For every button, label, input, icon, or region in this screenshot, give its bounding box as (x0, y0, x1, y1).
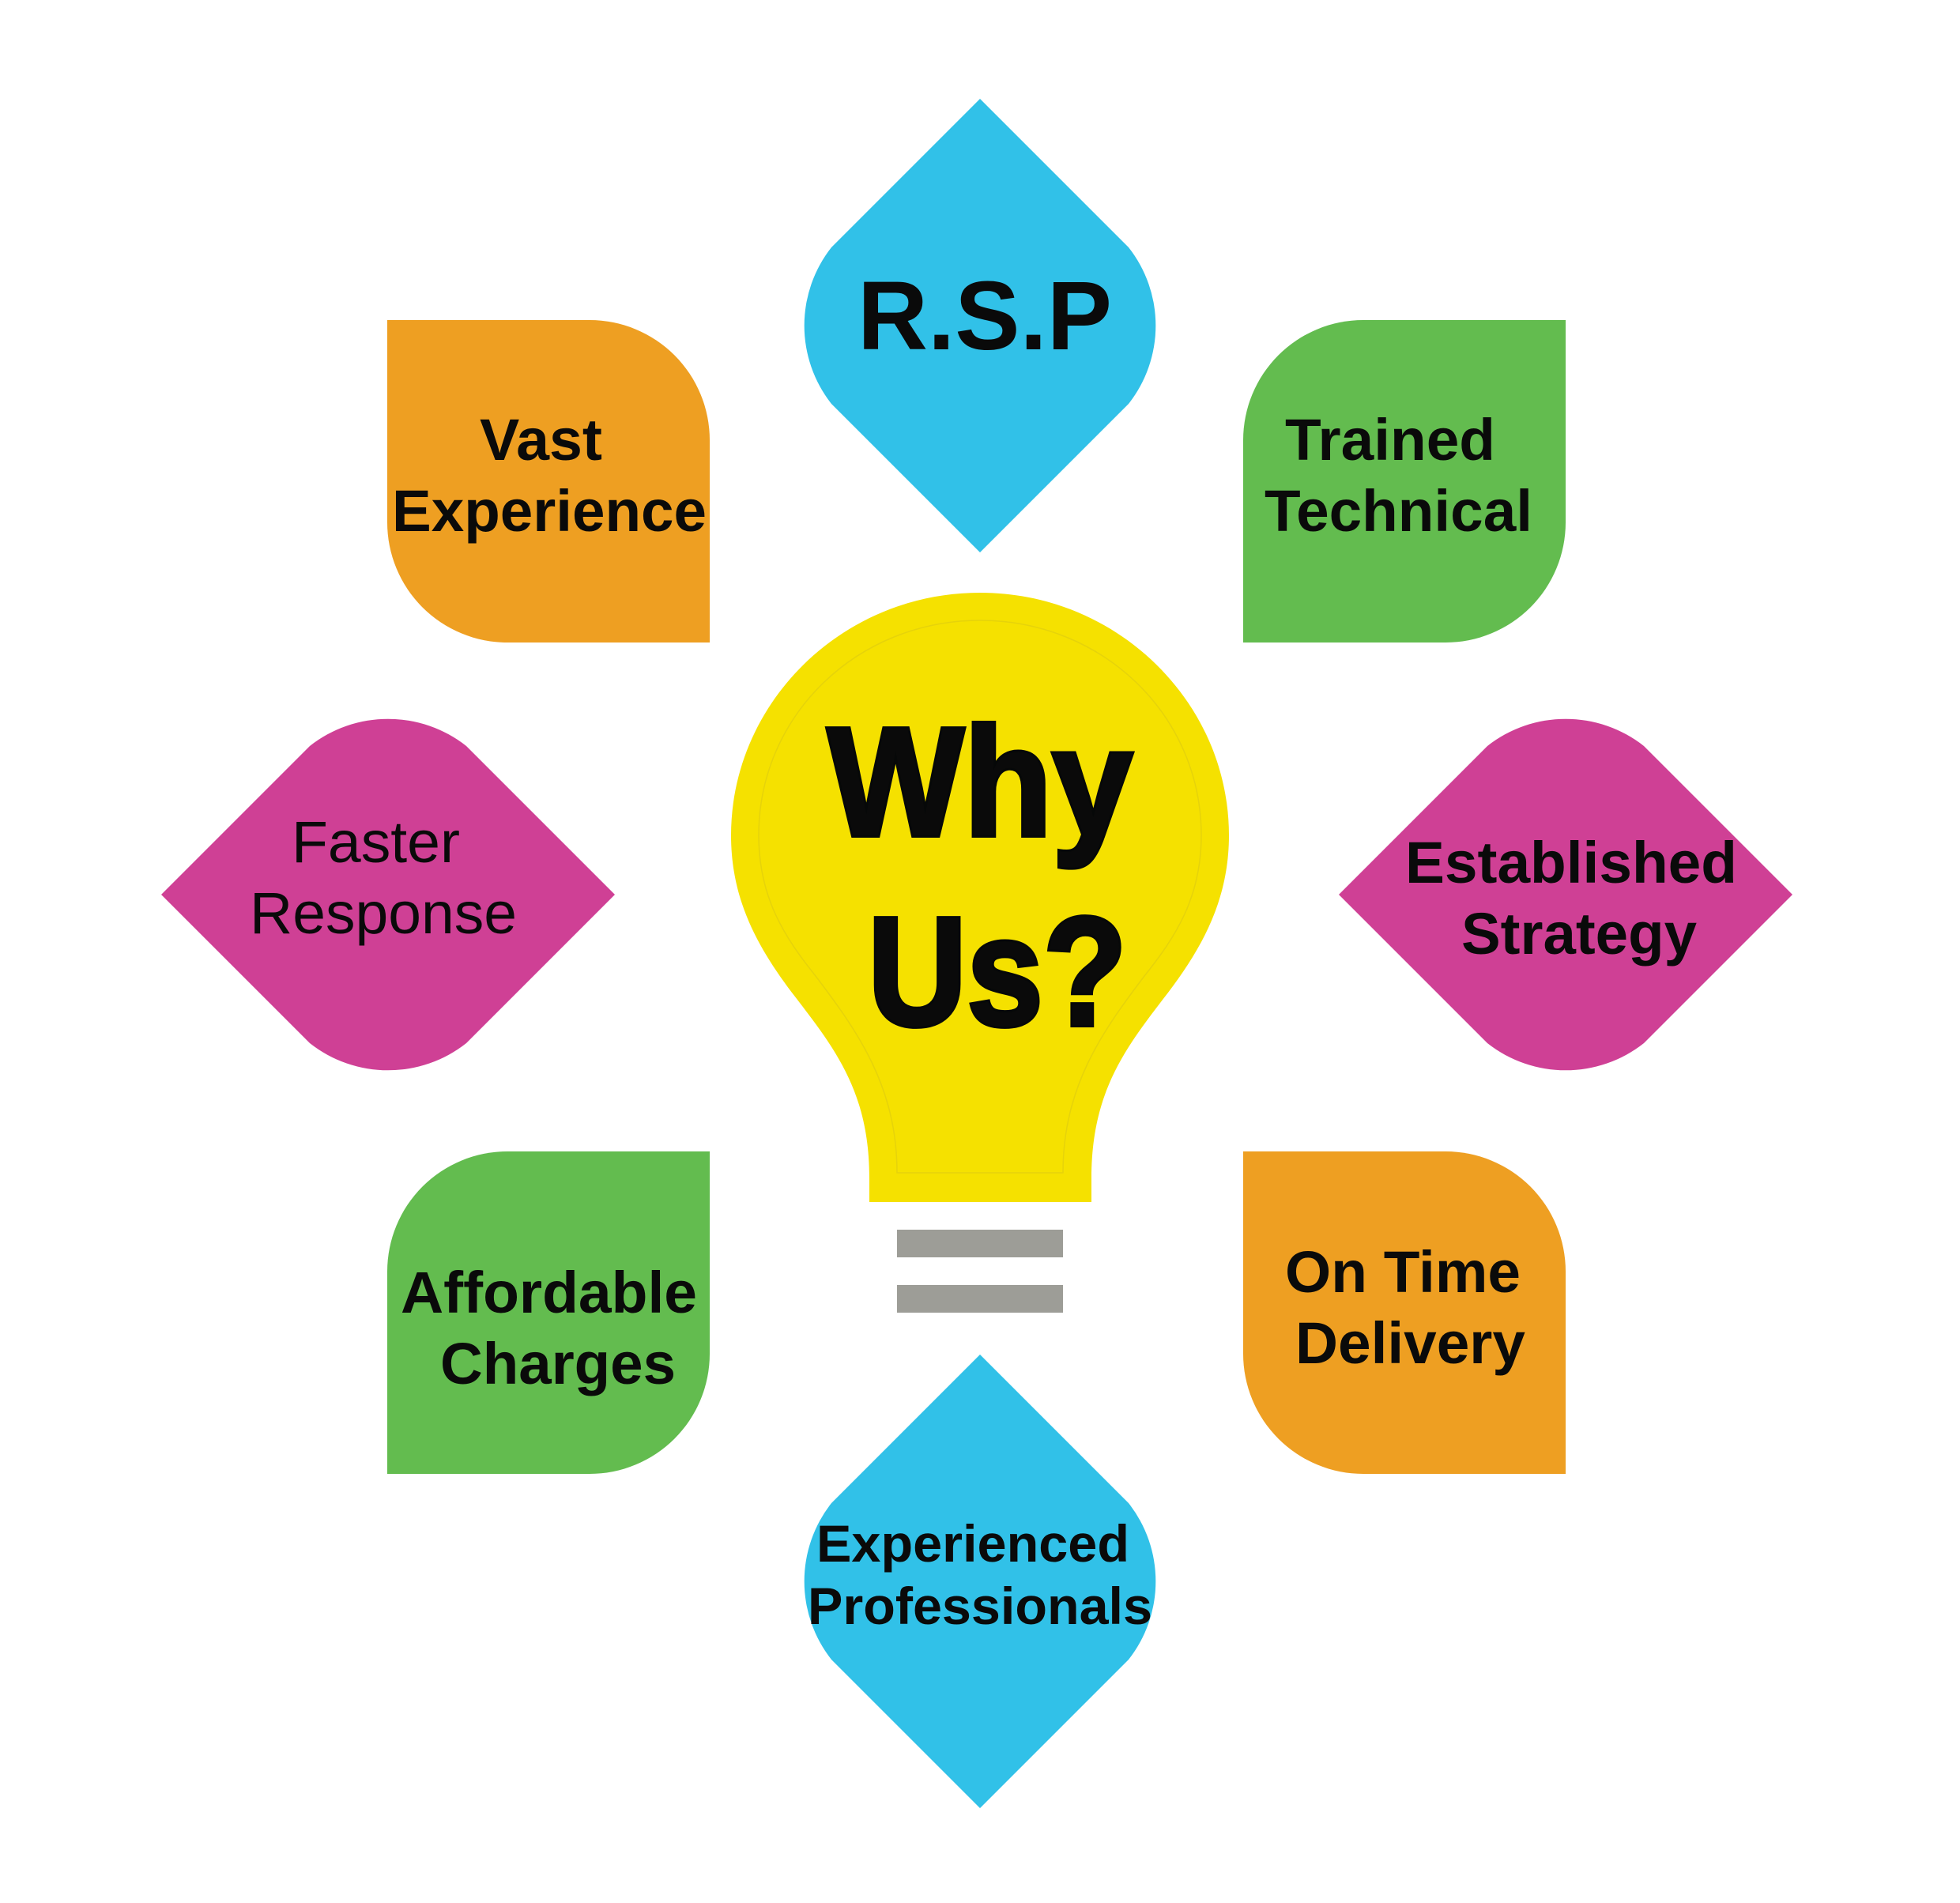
title: Why Us?: Why (827, 695, 1133, 869)
bulb glass (731, 593, 1229, 1202)
title: Why Us?: Us? (868, 885, 1127, 1058)
label: Vast Experience: Experience (392, 478, 707, 544)
panel: On Time Delivery (orange) (1243, 1151, 1566, 1474)
panel: Established Strategy (magenta diamond) (1339, 719, 1792, 1070)
panel: R.S.P (top blue diamond) (805, 99, 1155, 552)
light bulb (731, 593, 1229, 1313)
label: Vast Experience (392, 407, 707, 544)
label: Faster Response (250, 809, 517, 946)
label: On Time Delivery: On Time (1285, 1239, 1521, 1305)
label: Trained Technical: Trained (1285, 407, 1495, 473)
bulb base bars (897, 1230, 1063, 1313)
label: Established Strategy: Established (1405, 830, 1737, 895)
panel: Affordable Charges (green) (387, 1151, 710, 1474)
label: Established Strategy (1405, 830, 1737, 967)
panel: Faster Response (magenta diamond) (161, 719, 615, 1070)
label: Affordable Charges: Charges (440, 1331, 676, 1396)
label: On Time Delivery (1285, 1239, 1525, 1376)
label: Trained Technical: Technical (1265, 478, 1532, 544)
label: Faster Response: Faster (292, 809, 460, 875)
panel: Trained Technical (green) (1243, 320, 1566, 642)
label: Trained Technical (1265, 407, 1532, 544)
label: Established Strategy: Strategy (1461, 901, 1697, 967)
panel: Vast Experience (orange) (387, 320, 710, 642)
label: Vast Experience: Vast (480, 407, 602, 473)
panel: Experienced Professionals (bottom blue diamond) (805, 1355, 1155, 1808)
label: Affordable Charges: Affordable (401, 1260, 697, 1325)
bulb inner outline (759, 620, 1201, 1173)
label: Faster Response: Response (250, 880, 517, 946)
title: Why Us? (827, 695, 1133, 1058)
label: Experienced Professionals: Experienced (816, 1514, 1129, 1573)
label: On Time Delivery: Delivery (1295, 1310, 1525, 1376)
label: Experienced Professionals (808, 1514, 1152, 1635)
label: R.S.P: R.S.P (858, 262, 1112, 371)
label: Affordable Charges (401, 1260, 697, 1396)
label: Experienced Professionals: Professionals (808, 1577, 1152, 1635)
